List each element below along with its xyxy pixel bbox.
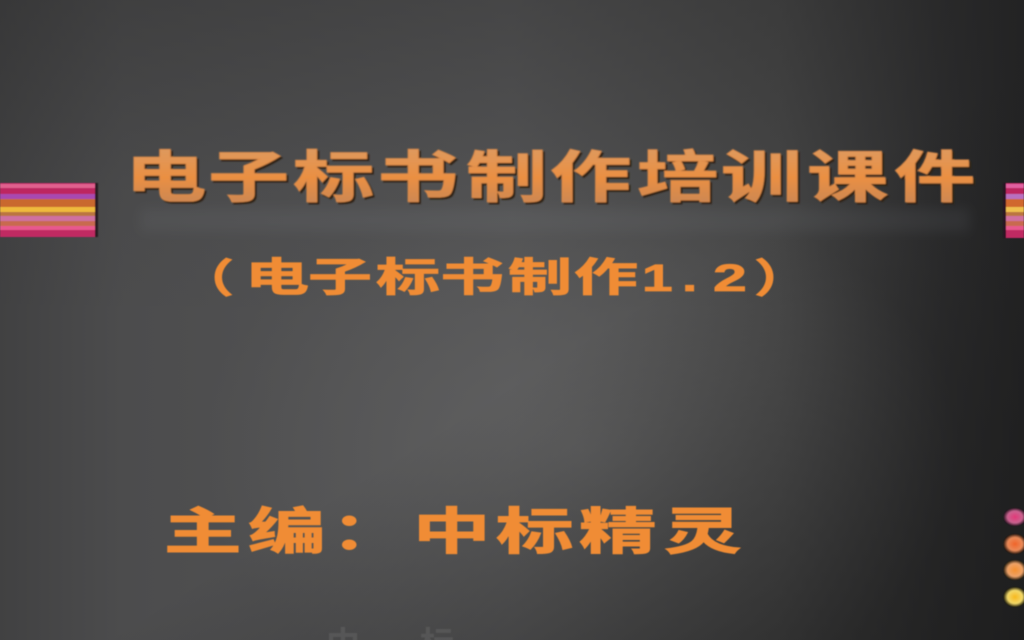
author line: 标 — [496, 504, 574, 560]
title: 训 — [721, 146, 802, 209]
title: 标 — [293, 146, 374, 209]
title: 制 — [468, 148, 549, 211]
title reflection — [140, 208, 970, 232]
author line: 主 — [164, 504, 242, 560]
subtitle: ） — [754, 257, 810, 301]
author line: 编 — [248, 504, 326, 560]
title: 子 — [208, 146, 289, 209]
title: 书 — [379, 148, 460, 211]
title: 件 — [894, 146, 975, 209]
subtitle: 子 — [308, 256, 372, 300]
author line: 灵 — [664, 504, 742, 560]
author line — [164, 503, 742, 560]
author line: ： — [332, 503, 401, 560]
title: 训 — [723, 148, 804, 211]
author line: 中 — [413, 504, 491, 560]
title — [125, 146, 977, 211]
author line: 精 — [579, 504, 657, 560]
subtitle: . — [682, 257, 697, 300]
left stripe decoration — [0, 183, 98, 237]
subtitle: 2 — [713, 257, 747, 299]
right stripe decoration — [1003, 183, 1024, 238]
title: 件 — [896, 148, 977, 211]
title: 制 — [466, 146, 547, 209]
title: 培 — [637, 146, 718, 209]
title: 课 — [809, 148, 890, 211]
subtitle — [178, 256, 810, 301]
title: 标 — [295, 148, 376, 211]
subtitle: 书 — [440, 256, 504, 300]
faint reflection text — [326, 626, 454, 640]
title: 课 — [807, 146, 888, 209]
subtitle: （ — [178, 257, 234, 301]
title: 书 — [377, 146, 458, 209]
title: 作 — [552, 148, 633, 211]
subtitle: 电 — [245, 256, 309, 300]
subtitle: 标 — [376, 256, 440, 300]
title: 电 — [127, 148, 208, 211]
title: 子 — [210, 148, 291, 211]
subtitle: 作 — [574, 256, 638, 300]
dot decorations — [1004, 508, 1024, 607]
title: 作 — [550, 146, 631, 209]
subtitle: 1 — [642, 257, 673, 300]
title: 培 — [639, 148, 720, 211]
title: 电 — [125, 146, 206, 209]
subtitle: 制 — [508, 256, 572, 300]
